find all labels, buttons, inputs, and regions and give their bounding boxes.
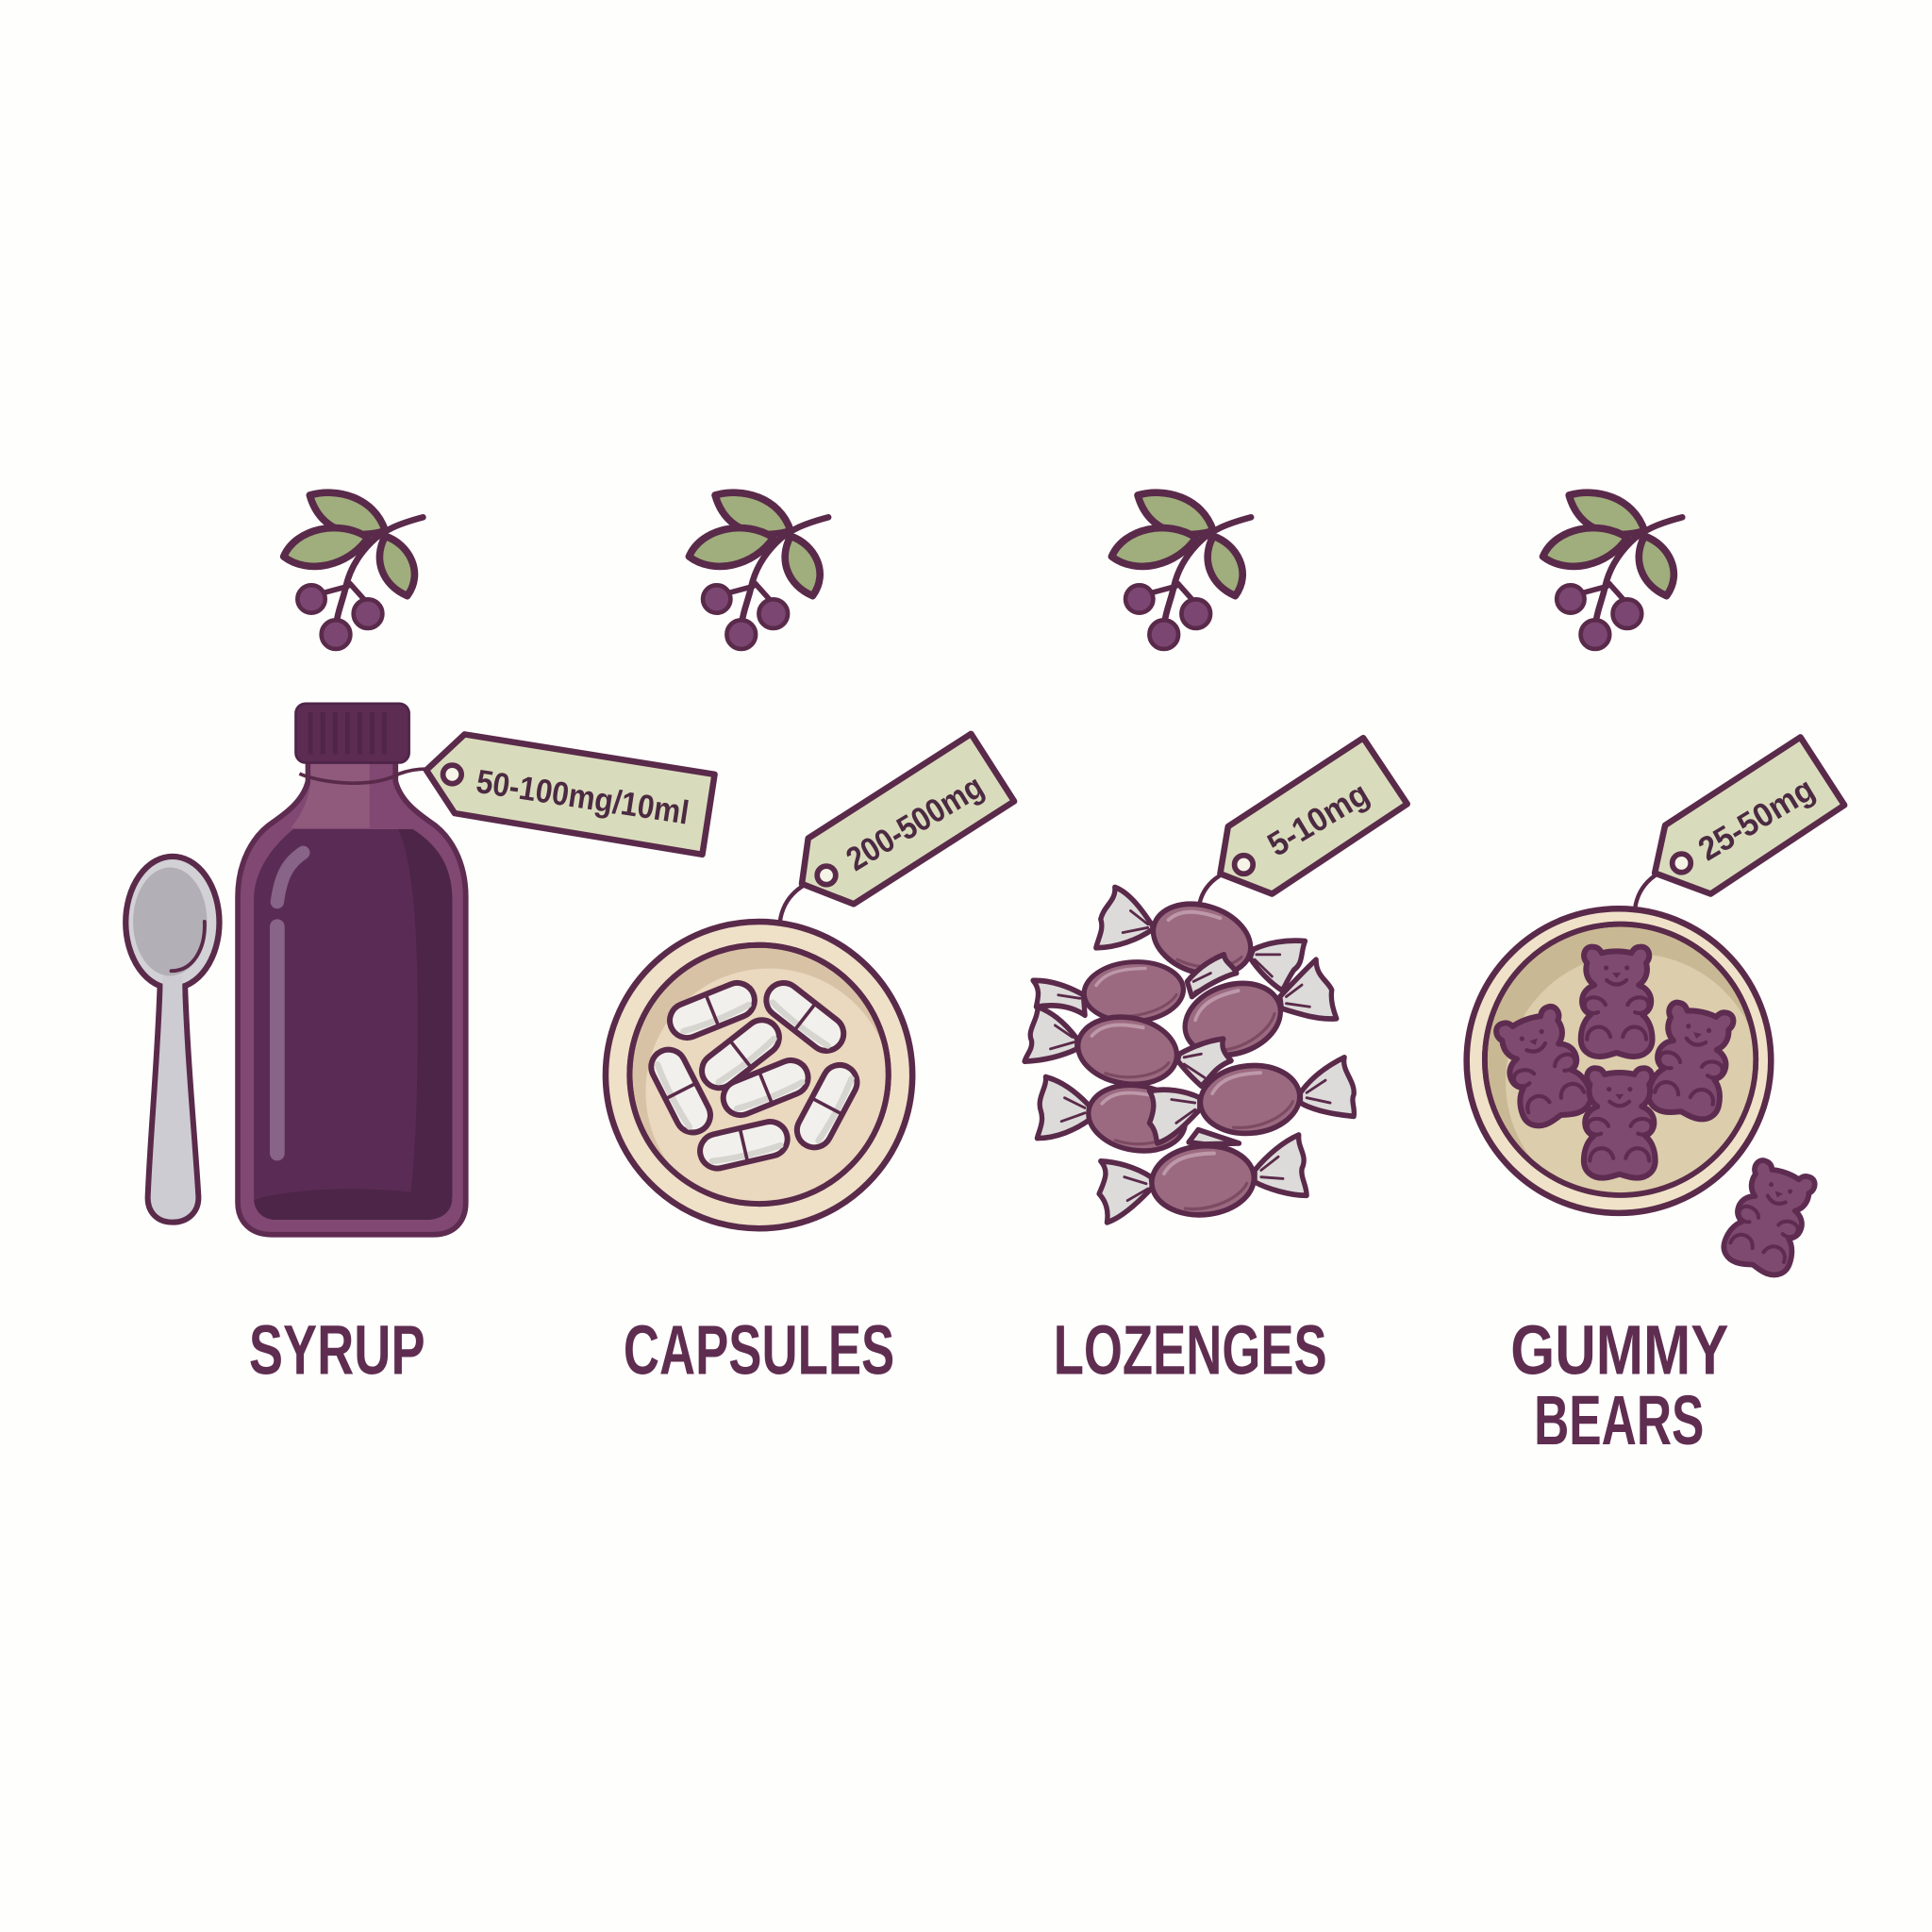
- icon: elderberry sprig above syrup: [284, 492, 423, 649]
- icon: capsule plate: [606, 922, 912, 1228]
- icon: spoon: [125, 857, 219, 1223]
- icon: elderberry sprig above lozenges: [1111, 492, 1251, 649]
- panel: syrup: [125, 704, 715, 1235]
- lozenge top: [1096, 887, 1305, 991]
- tag: lozenges dose: [1220, 738, 1407, 894]
- lozenge left middle: [1024, 1007, 1231, 1091]
- gummy bear top: [1581, 947, 1653, 1057]
- gummy bear left: [1491, 1003, 1595, 1131]
- icon: syrup bottle: [238, 704, 466, 1235]
- lozenge right lower: [1149, 1058, 1354, 1143]
- panel: capsules: [606, 734, 1014, 1228]
- tag string: [1199, 865, 1242, 907]
- tag string: [1635, 864, 1678, 908]
- icon: wrapped lozenges pile: [1024, 887, 1354, 1223]
- label: gummy bears: BEARS: [1534, 1381, 1704, 1459]
- label: gummy bears: GUMMY: [1510, 1310, 1728, 1389]
- lozenge left lower: [1037, 1077, 1239, 1158]
- lozenge left upper: [1033, 955, 1237, 1024]
- tag: capsules dose: 200-500mg: [840, 768, 990, 878]
- tag: lozenges dose: 5-10mg: [1261, 775, 1375, 864]
- label: syrup: SYRUP: [249, 1310, 425, 1389]
- icon: loose gummy bear: [1720, 1158, 1820, 1280]
- lozenge bottom: [1099, 1135, 1307, 1223]
- gummy bear bottom: [1584, 1068, 1656, 1178]
- panel: gummy bears: [1467, 737, 1844, 1280]
- label: capsules: CAPSULES: [624, 1310, 894, 1389]
- tag string: [780, 876, 823, 922]
- panel: lozenges: [1024, 738, 1407, 1223]
- gummy bear right: [1645, 1000, 1738, 1123]
- icon: elderberry sprig above capsules: [689, 492, 828, 649]
- label: gummy bears: [1510, 1310, 1728, 1459]
- tag: gummy bears dose: [1655, 737, 1844, 894]
- label: lozenges: LOZENGES: [1054, 1310, 1327, 1389]
- icon: gummy plate: [1467, 908, 1771, 1213]
- tag: gummy bears dose: 25-50mg: [1692, 771, 1821, 868]
- tag: syrup dose: 50-100mg/10ml: [474, 763, 691, 832]
- tag: syrup dose: [426, 734, 715, 855]
- tag: capsules dose: [802, 734, 1014, 904]
- capsules: [645, 976, 863, 1172]
- icon: elderberry sprig above gummy bears: [1543, 492, 1682, 649]
- lozenge right middle: [1177, 959, 1337, 1066]
